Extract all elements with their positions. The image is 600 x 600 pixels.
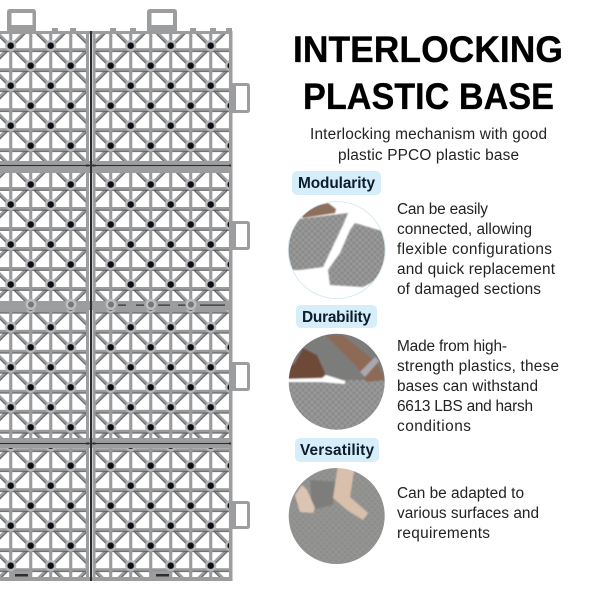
label: Modularity: Modularity [298, 175, 375, 192]
text: Modularity description: flexible configurations [397, 241, 552, 258]
text: Durability description [397, 338, 559, 435]
product photo: interlocking plastic base tiles [0, 9, 250, 581]
title: INTERLOCKING [293, 28, 563, 70]
photo: Modularity [286, 202, 387, 298]
title: PLASTIC BASE [303, 75, 554, 117]
tile rows [0, 32, 231, 580]
text: Modularity description [397, 201, 556, 298]
text: Durability description: 6613 LBS and harsh [397, 398, 533, 415]
text: Versatility description: various surfaces and [397, 505, 539, 522]
label: Durability: Durability [302, 309, 371, 326]
tile frames and seams [0, 28, 232, 581]
text: Versatility description [397, 485, 539, 542]
photo: Durability [288, 334, 385, 430]
label: Versatility: Versatility [300, 442, 374, 459]
text: Modularity description: connected, allowing [397, 221, 532, 238]
text: Modularity description: of damaged sections [397, 281, 541, 298]
subtitle: Interlocking mechanism with good [310, 126, 547, 143]
subtitle: plastic PPCO plastic base [338, 147, 519, 164]
label: Modularity [292, 171, 381, 195]
text: Durability description: Made from high- [397, 338, 507, 355]
label: Durability [296, 305, 377, 328]
text: Durability description: strength plastics, these [397, 358, 559, 375]
text: Versatility description: Can be adapted to [397, 485, 524, 502]
photo: Versatility [288, 468, 385, 564]
text: Modularity description: and quick replacement [397, 261, 556, 278]
slot rings [26, 299, 196, 310]
label: Versatility [295, 438, 379, 462]
title [293, 28, 563, 117]
text: Durability description: conditions [397, 418, 471, 435]
text: Versatility description: requirements [397, 525, 490, 542]
text: Durability description: bases can withstand [397, 378, 538, 395]
connector tabs [7, 9, 250, 529]
text: Modularity description: Can be easily [397, 201, 488, 218]
subtitle [310, 126, 547, 164]
